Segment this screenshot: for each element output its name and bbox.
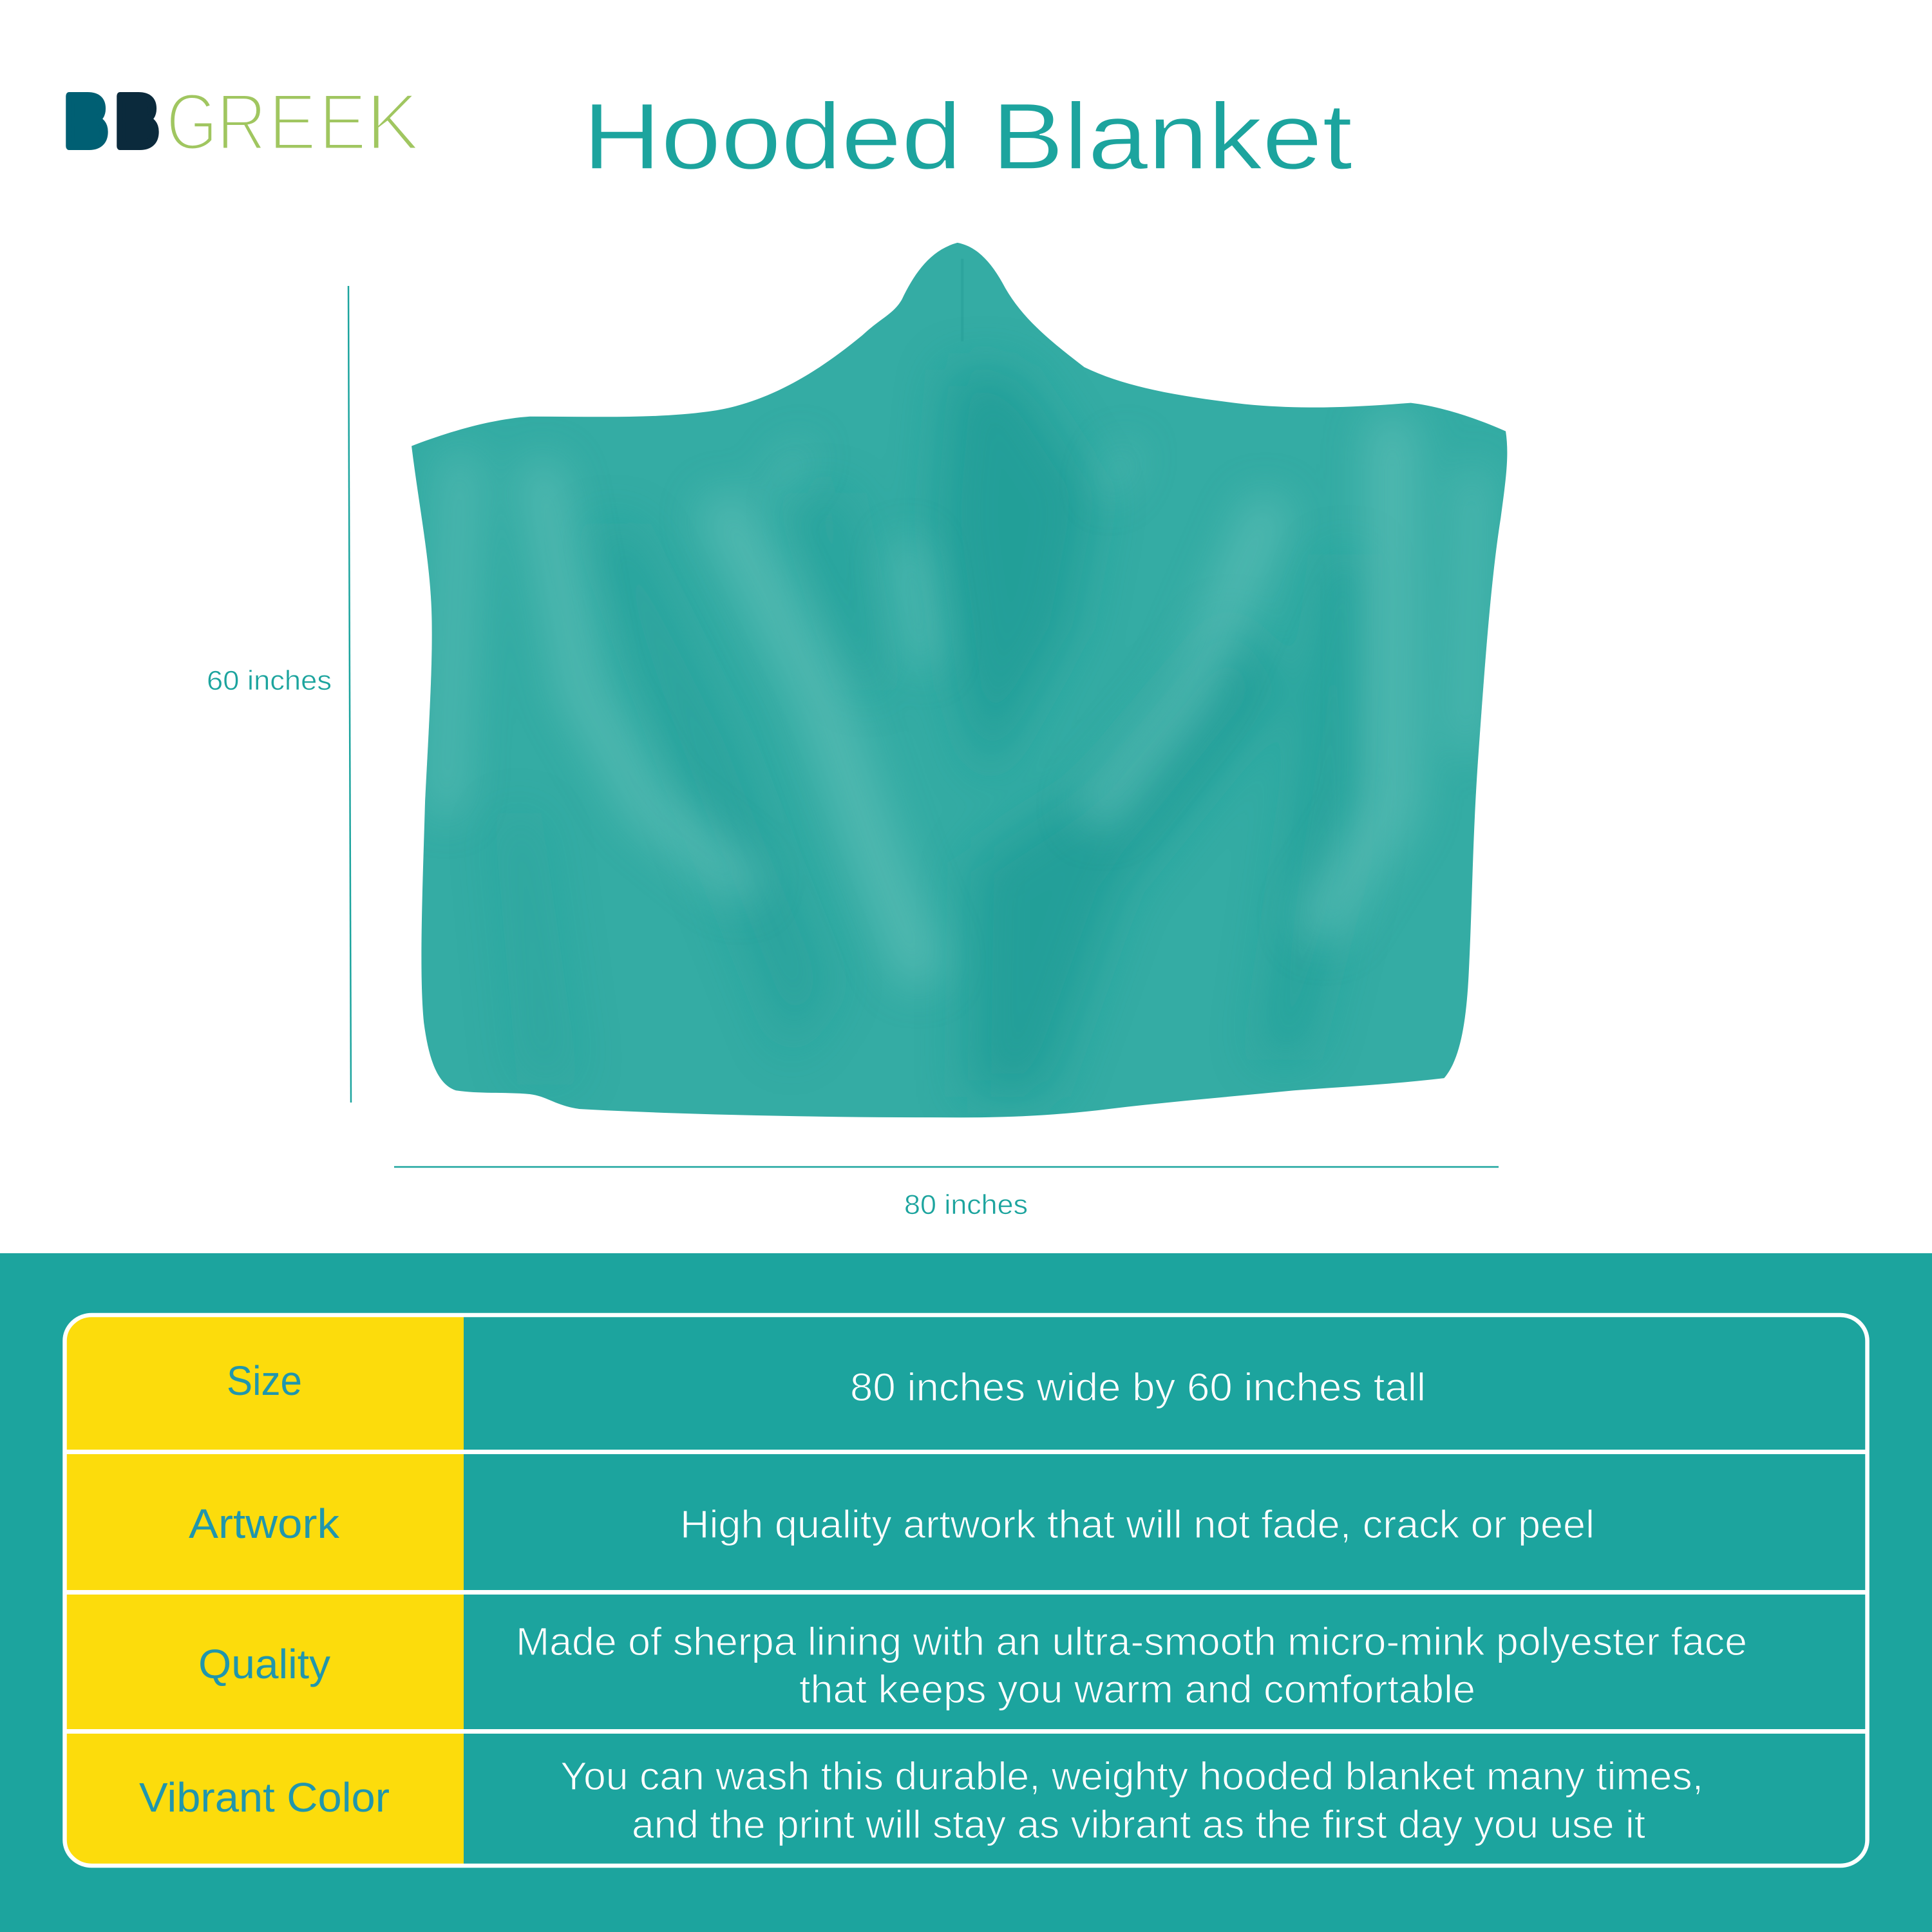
- title: Hooded Blanket: [583, 84, 1352, 189]
- row: quality: Made of sherpa lining with an ultra-smooth micro-mink polyester face: [516, 1620, 1747, 1663]
- logo: [65, 78, 420, 167]
- row: vibrant color: Vibrant Color: [139, 1774, 390, 1821]
- row: size: [227, 1358, 1426, 1409]
- logo: E: [269, 78, 316, 167]
- logo: E: [319, 78, 366, 167]
- logo: R: [216, 78, 267, 167]
- specifications table: [64, 1315, 1868, 1866]
- table border: [64, 1315, 1868, 1866]
- row: vibrant color: and the print will stay as vibrant as the first day you use it: [632, 1803, 1645, 1846]
- row: quality: [198, 1620, 1747, 1711]
- row: size: Size: [227, 1358, 302, 1404]
- width label: 80 inches: [904, 1189, 1028, 1220]
- yellow label column: [64, 1315, 464, 1866]
- row: quality: that keeps you warm and comfortable: [799, 1667, 1475, 1711]
- shadows: [617, 365, 1356, 1117]
- row: artwork: [189, 1501, 1595, 1547]
- row: quality: Quality: [198, 1641, 330, 1687]
- logo: G: [166, 78, 218, 167]
- logo: K: [366, 78, 420, 167]
- row dividers: [64, 1450, 1868, 1734]
- blanket illustration: [394, 234, 1528, 1133]
- row: size: 80 inches wide by 60 inches tall: [850, 1365, 1426, 1409]
- highlights: [446, 437, 1472, 961]
- row: artwork: Artwork: [189, 1501, 340, 1547]
- row: artwork: High quality artwork that will not fade, crack or peel: [680, 1502, 1595, 1546]
- logo: B: [65, 80, 108, 162]
- width dimension line: [394, 1166, 1499, 1168]
- row: vibrant color: You can wash this durable, weighty hooded blanket many times,: [560, 1754, 1703, 1798]
- row: vibrant color: [139, 1754, 1703, 1846]
- panel: specifications background: [0, 1253, 1932, 1932]
- height label: 60 inches: [207, 665, 332, 696]
- height dimension line: [348, 286, 351, 1103]
- logo: B: [116, 80, 158, 162]
